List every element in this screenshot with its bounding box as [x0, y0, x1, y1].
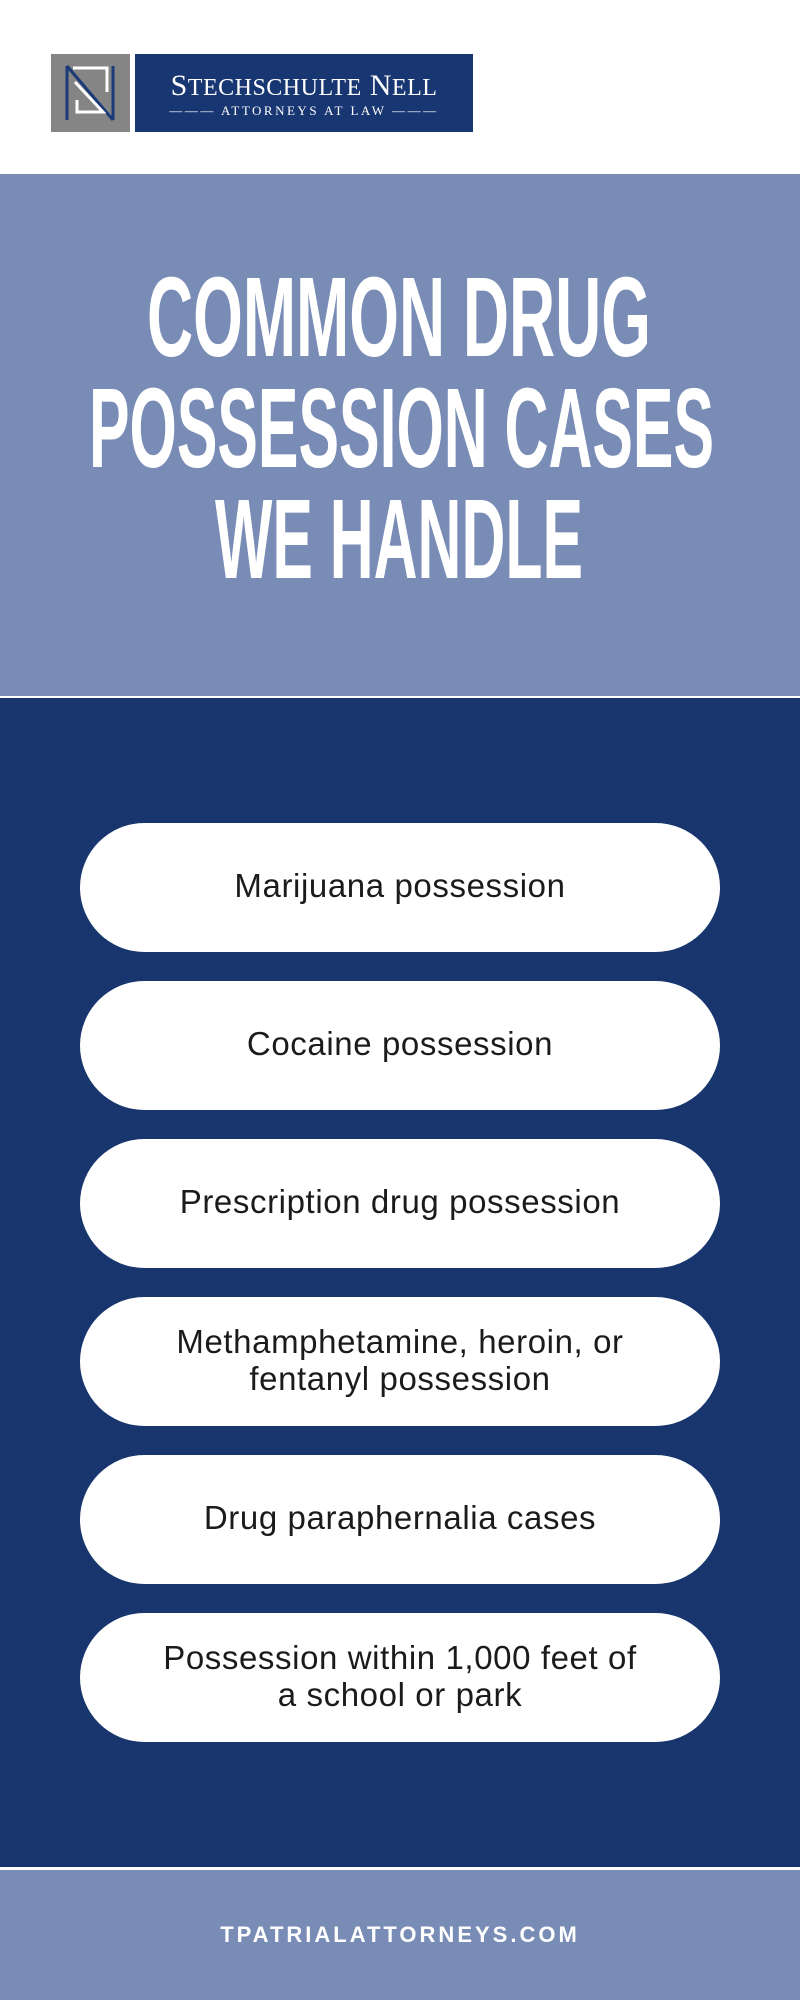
logo wordmark: ——— ATTORNEYS AT LAW ——— [169, 103, 439, 118]
item 2 [80, 981, 720, 1110]
title [89, 254, 714, 602]
item 3: Prescription drug possession [180, 1183, 620, 1220]
item 6 [80, 1613, 720, 1742]
logo [51, 54, 473, 132]
item 4: Methamphetamine, heroin, or [176, 1322, 624, 1360]
logo wordmark: STECHSCHULTE NELL [171, 69, 437, 102]
item 2: Cocaine possession [247, 1025, 553, 1062]
item 5 [80, 1455, 720, 1584]
footer [0, 1870, 800, 2000]
item 6: a school or park [278, 1676, 522, 1712]
title band [0, 174, 800, 696]
item 5: Drug paraphernalia cases [204, 1499, 596, 1536]
item 6: Possession within 1,000 feet of [163, 1638, 637, 1676]
list panel [0, 698, 800, 1867]
footer: TPATRIALATTORNEYS.COM [220, 1922, 580, 1947]
item 1 [80, 823, 720, 952]
item 4: fentanyl possession [249, 1360, 551, 1396]
item 4 [80, 1297, 720, 1426]
logo wordmark [135, 54, 473, 132]
item 1: Marijuana possession [234, 867, 566, 904]
item 3 [80, 1139, 720, 1268]
logo mark [51, 54, 130, 132]
